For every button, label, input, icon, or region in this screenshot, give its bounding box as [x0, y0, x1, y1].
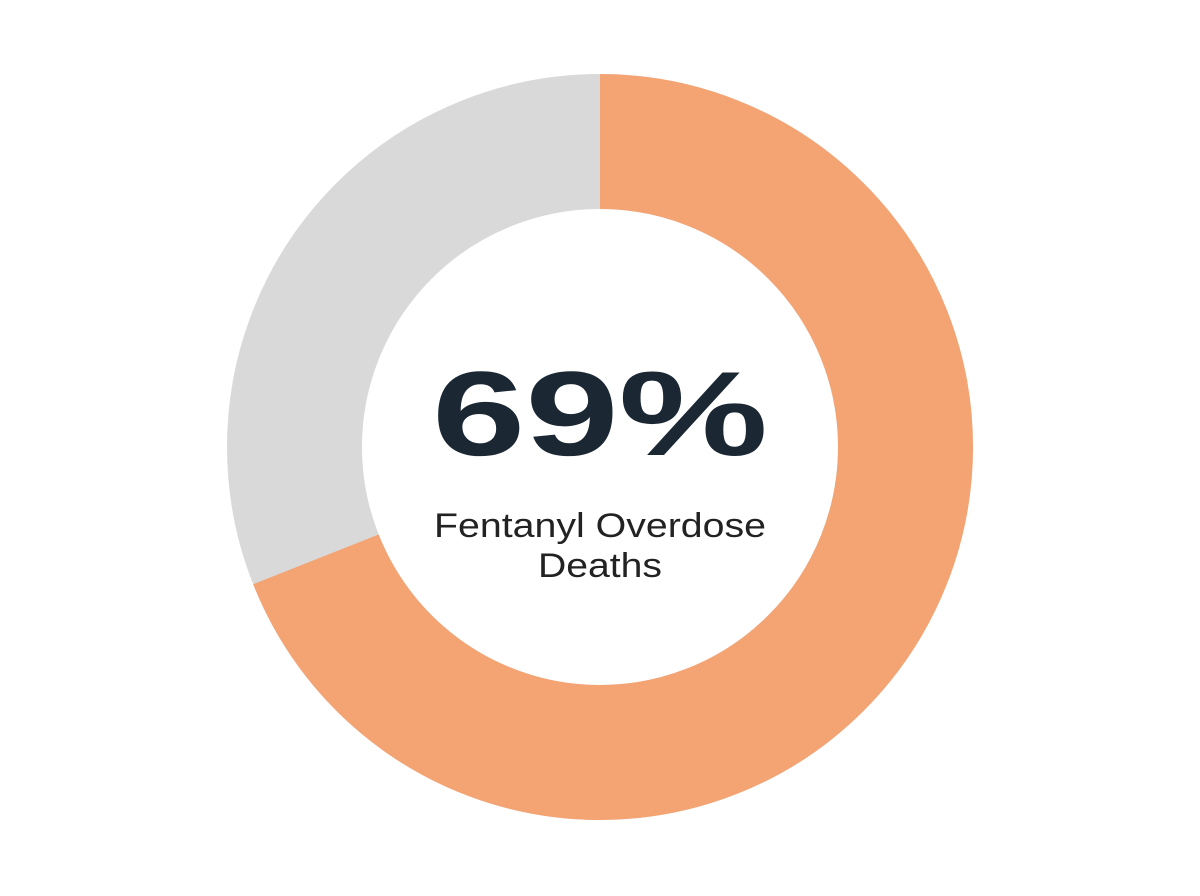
ring segment: 69% fentanyl: [294, 142, 906, 752]
caption: Fentanyl Overdose: [434, 507, 766, 545]
caption: Deaths: [538, 547, 662, 585]
center label: [432, 347, 768, 585]
ring background: remaining share: [294, 142, 906, 752]
big percentage: 69%: [432, 347, 768, 481]
caption: [434, 507, 766, 585]
